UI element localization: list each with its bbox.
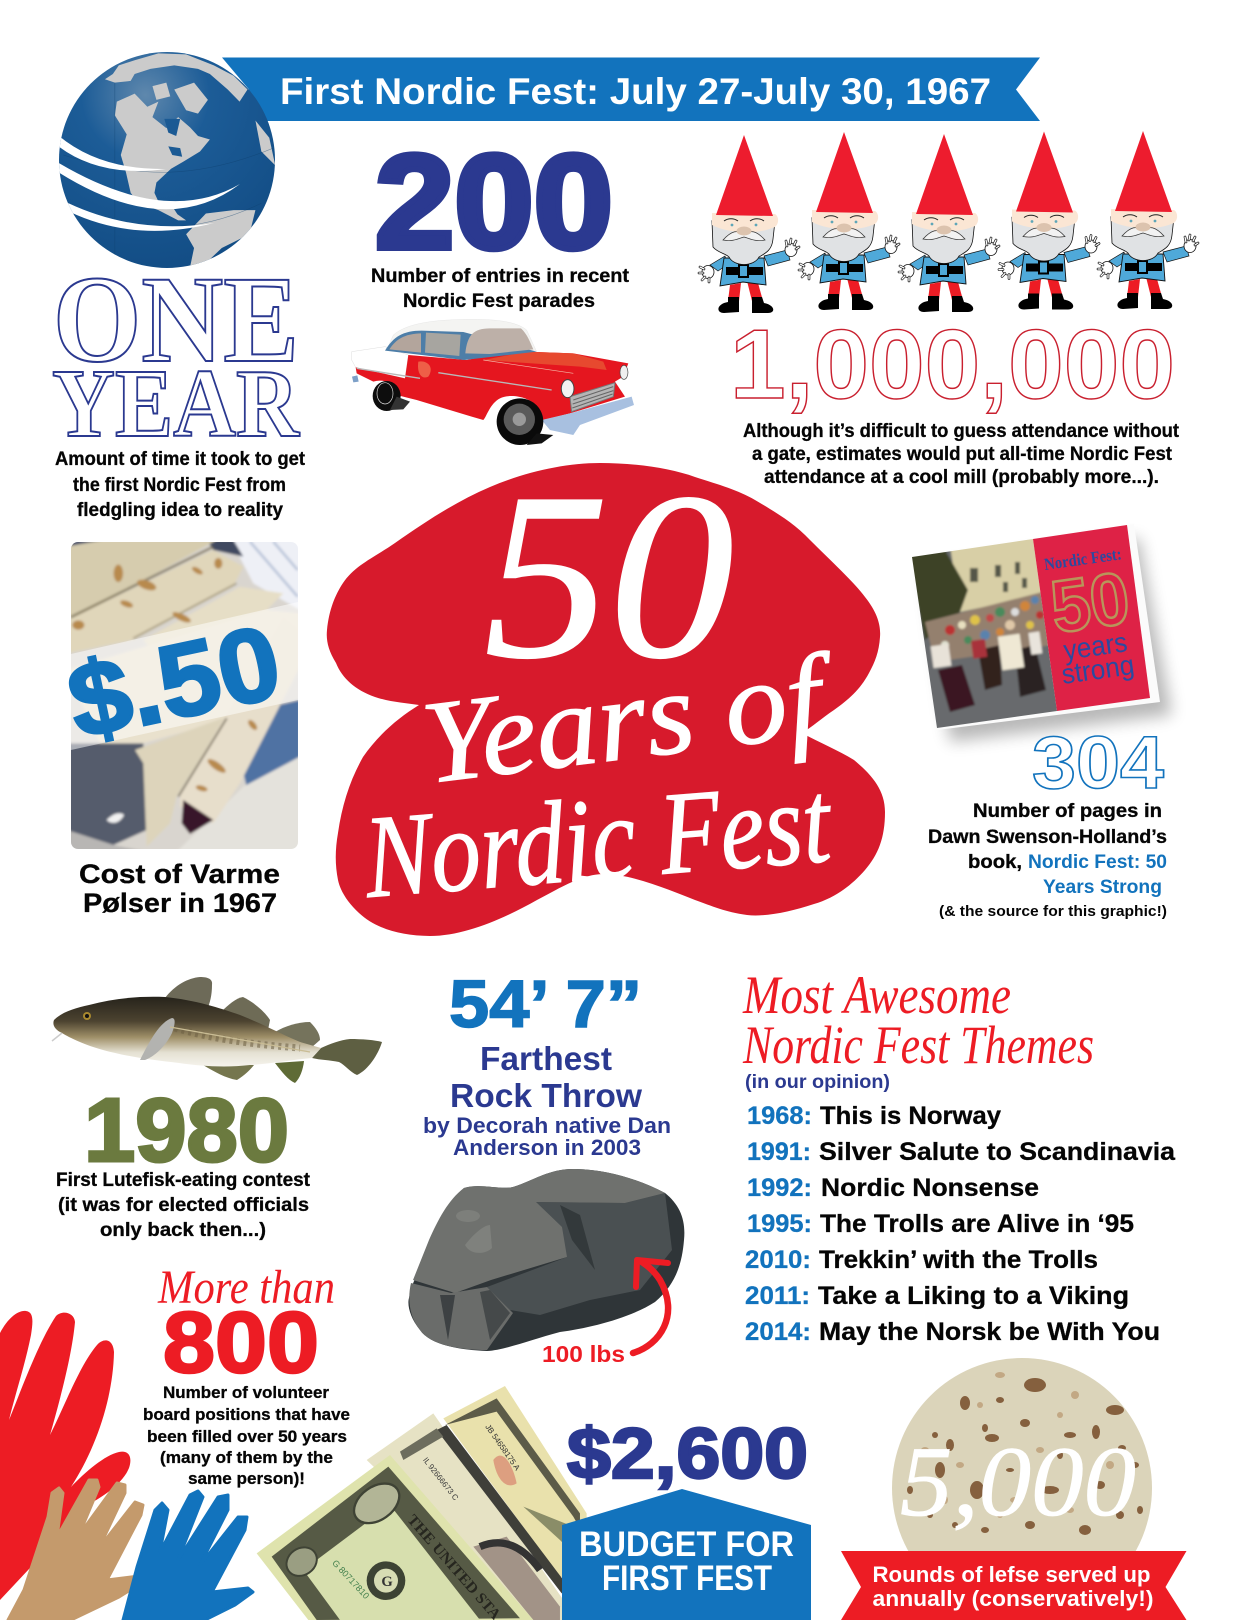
list: themes by year: Take a Liking to a Viking [818,1282,1129,1310]
text: book caption: Nordic Fest: 50 [1028,852,1167,873]
list: themes by year: 2010: [745,1246,811,1274]
text: volunteer caption: board positions that have [143,1405,350,1424]
title: 50: 50 [484,445,734,708]
list: themes by year: Silver Salute to Scandinavia [819,1138,1176,1166]
icon: cod fish [52,977,382,1083]
list: themes by year: 2014: [745,1318,811,1346]
text: volunteer caption: (many of them by the [160,1448,333,1467]
ribbon caption: Rounds of lefse served up [872,1562,1150,1587]
list: themes by year: 2011: [745,1282,810,1310]
text: lutefisk caption: First Lutefisk-eating contest [56,1170,311,1191]
list: themes by year: The Trolls are Alive in ‘95 [820,1210,1134,1238]
text: attendance caption: attendance at a cool mill (probably more...). [764,467,1159,488]
icon: blue hand [123,1491,253,1620]
text: book caption: book, [968,852,1022,873]
one dollar bill [257,1455,533,1620]
heading: most awesome themes: Most Awesome [742,965,1011,1025]
gnome 4 [999,132,1099,310]
text: farthest rock throw: by Decorah native Dan [423,1113,671,1138]
outlined word ONE: ONE [53,251,299,388]
red book cover [1033,525,1150,711]
list: themes by year: 1995: [747,1210,812,1238]
text: cost of varme polser: Pølser in 1967 [83,888,277,918]
icon: tan hand [8,1480,149,1620]
ribbon caption line 2: annually (conservatively!) [872,1586,1154,1611]
icon: red classic car [352,319,634,445]
gnome 3 [899,134,999,312]
script: More than: More than [157,1261,335,1314]
price: $.50: $.50 [59,604,290,761]
list: themes by year: This is Norway [820,1102,1001,1130]
list: themes by year: 1991: [747,1138,811,1166]
first fest label: FIRST FEST [602,1559,772,1598]
script number: 5,000: 5,000 [900,1426,1136,1537]
text: one year caption: fledgling idea to reality [77,500,283,521]
heading: ONE YEAR [52,251,300,458]
stat: 54' 7": 54’ 7” [449,967,642,1042]
text: book caption: (& the source for this graphic!) [939,903,1167,920]
list: themes by year: 1968: [747,1102,812,1130]
five dollar bill [367,1413,587,1620]
cover title: Nordic Fest: [1043,544,1123,574]
cover subtitle years: years [1062,626,1129,666]
text: farthest rock throw [423,1040,671,1160]
text: attendance caption: Although it’s difficult to guess attendance without [743,421,1180,442]
text: farthest rock throw: Farthest [480,1040,612,1077]
panel: lefse round [841,1358,1186,1620]
heading: most awesome themes: Nordic Fest Themes [742,1015,1094,1075]
text: attendance caption [743,421,1180,488]
stat: 1980: 1980 [84,1081,289,1181]
arrow: points at rock [633,1260,668,1353]
text: book caption [928,801,1167,920]
text: farthest rock throw: Rock Throw [450,1077,642,1114]
list: themes by year: 1992: [747,1174,812,1202]
text: parade entries caption: Nordic Fest parades [403,291,595,312]
text: cost of varme polser: Cost of Varme [79,859,280,889]
number: 800: 800 [163,1295,319,1391]
icon: dollar bills [257,1386,587,1620]
text: lutefisk caption [56,1170,311,1241]
stat: 1,000,000: 1,000,000 [730,309,1175,419]
text: volunteer caption: been filled over 50 years [147,1427,347,1446]
text: farthest rock throw: Anderson in 2003 [453,1135,641,1160]
list: themes by year: May the Norsk be With You [819,1318,1160,1346]
one dollar bill: THE UNITED STA [404,1511,504,1620]
panel: central red blob with title [327,445,885,936]
text: one year caption: Amount of time it took to get [55,449,306,470]
one dollar bill: G [381,1574,393,1590]
text: book caption: Number of pages in [973,801,1162,822]
list: themes by year: Nordic Nonsense [821,1174,1039,1202]
cover 50 logo: 50 [1046,556,1134,649]
stat: more than 800 [157,1261,335,1391]
red ribbon [841,1551,1186,1620]
subheading: (in our opinion) [745,1072,890,1093]
icon: globe [57,52,275,269]
label: 100 lbs: 100 lbs [542,1341,625,1367]
banner: first Nordic Fest date [222,58,1040,121]
text: parade entries caption: Number of entries in recent [371,266,630,287]
five dollar bill: IL 92666673 C [421,1456,460,1502]
text: one year caption [55,449,306,521]
text: attendance caption: a gate, estimates would put all-time Nordic Fest [752,444,1173,465]
panel: book cover photo [900,524,1172,742]
stat: 200: 200 [375,128,613,277]
gnome 5 [1098,131,1198,309]
white diagonal price band [71,602,298,750]
budget label: BUDGET FOR [579,1525,794,1564]
banner title: First Nordic Fest: July 27-July 30, 1967 [280,71,991,112]
panel: budget for first fest [562,1489,811,1620]
text: parade entries caption [371,266,630,312]
outlined word YEAR: YEAR [52,350,300,458]
list: themes by year [745,1102,1176,1346]
text: cost of varme polser [79,859,280,918]
text: lutefisk caption: only back then...) [100,1220,266,1241]
text: volunteer caption: Number of volunteer [163,1383,329,1402]
cover subtitle strong: strong [1060,649,1136,690]
gnome 2 [799,132,899,310]
stat: $2,600: $2,600 [567,1415,808,1494]
text: book caption: Years Strong [1043,877,1162,898]
gnome 1 [699,135,799,313]
icon: rock [408,1169,684,1351]
text: one year caption: the first Nordic Fest from [73,475,286,496]
text: volunteer caption: same person)! [188,1469,305,1488]
text: lutefisk caption: (it was for elected officials [58,1195,309,1216]
text: volunteer caption [143,1383,350,1488]
text: book caption: Dawn Swenson-Holland’s [928,827,1167,848]
heading: most awesome themes [742,965,1094,1093]
title: Years of: Years of [415,628,843,809]
title: Nordic Fest: Nordic Fest [359,756,837,923]
ten dollar bill [443,1386,587,1587]
icon: red hand [0,1311,130,1600]
stat: 304: 304 [1032,721,1164,804]
ten dollar bill: JB 54658175 A [483,1423,522,1473]
gnomes row [699,131,1198,313]
list: themes by year: Trekkin’ with the Trolls [819,1246,1098,1274]
one dollar bill: G 80717810 [330,1558,371,1601]
panel: varme polser photo with price [59,538,300,852]
